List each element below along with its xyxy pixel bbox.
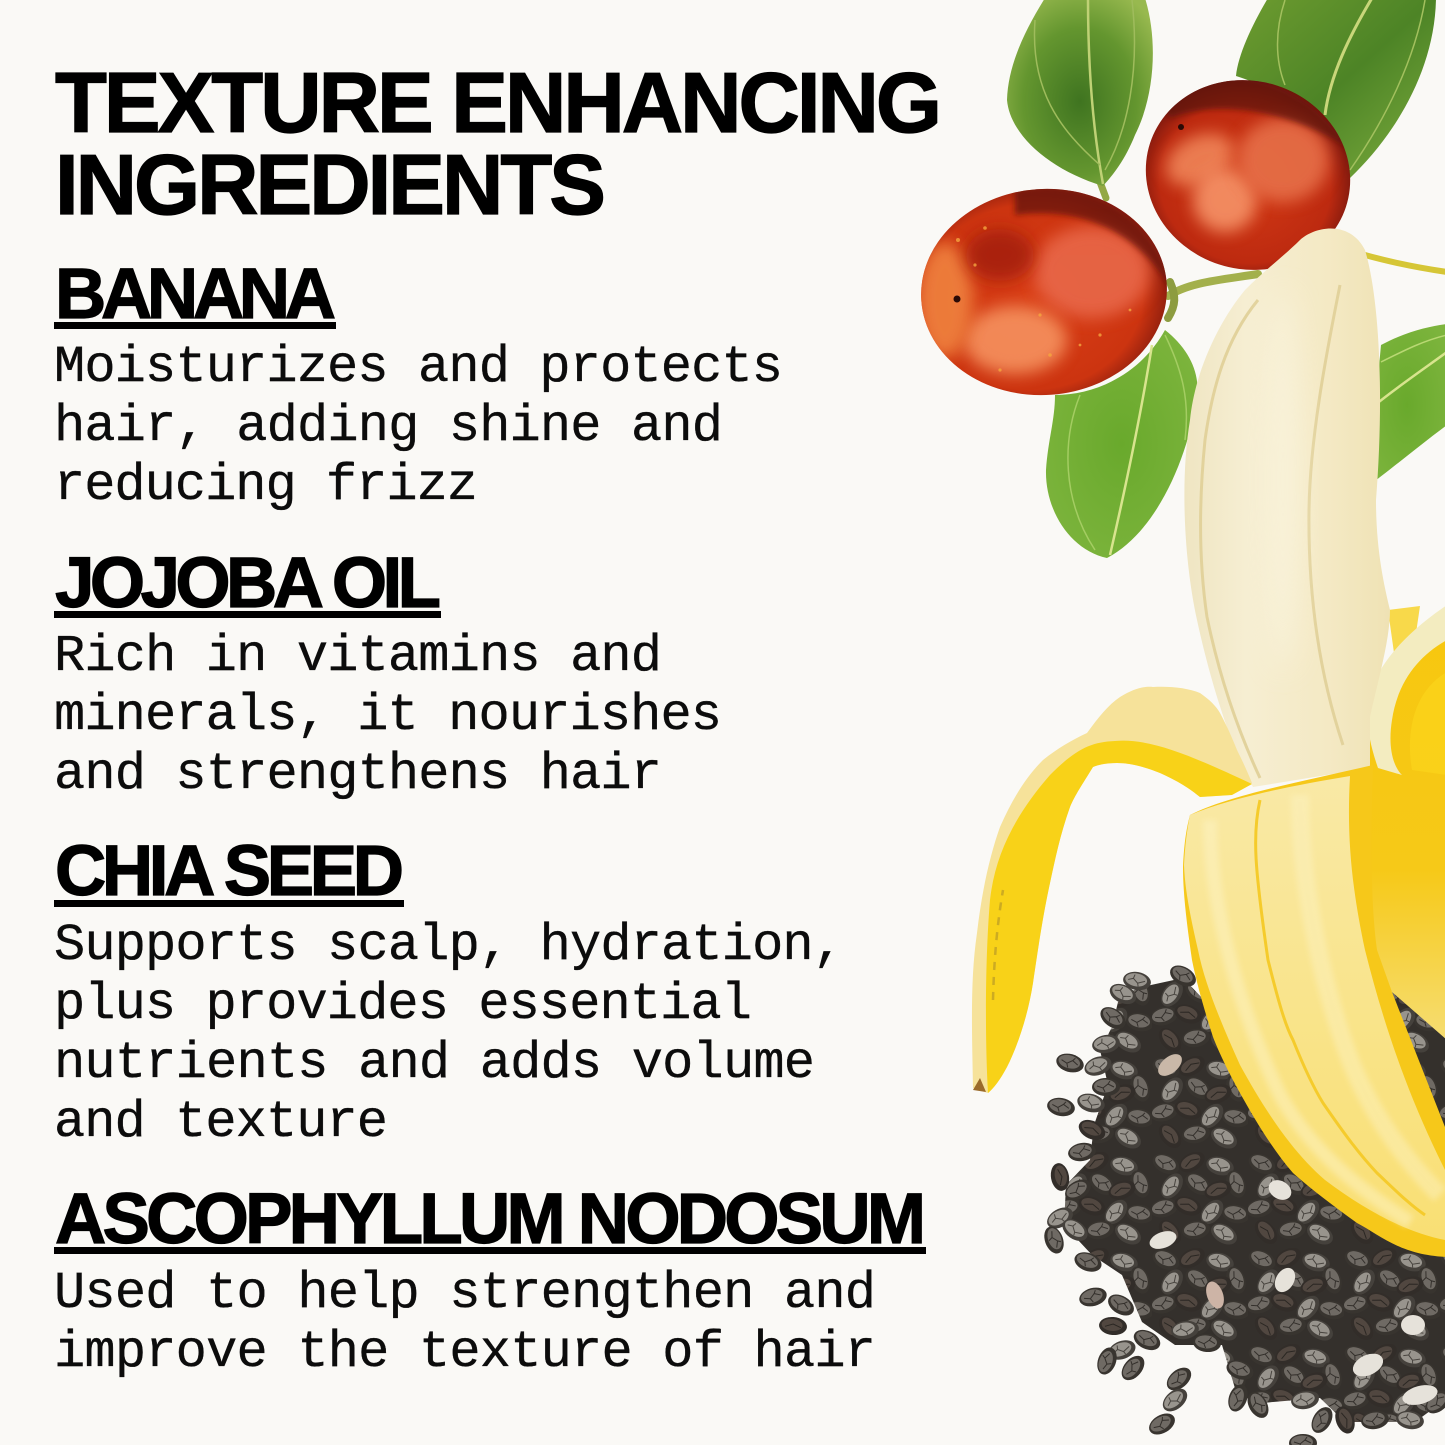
heading: banana: BANANA xyxy=(55,255,336,334)
title: TEXTURE ENHANCING xyxy=(55,56,942,151)
heading: chia seed: CHIA SEED xyxy=(55,832,404,911)
text: ascophyllum description: Used to help strengthen and xyxy=(54,1264,876,1323)
leaf: top left xyxy=(1007,0,1153,186)
fruit: left jujube xyxy=(921,188,1167,396)
text: banana description: hair, adding shine and xyxy=(54,397,723,456)
text: banana description: reducing frizz xyxy=(54,456,478,515)
text: jojoba description: and strengthens hair xyxy=(54,745,662,804)
text: chia description: plus provides essential xyxy=(54,975,752,1034)
icon: banana xyxy=(972,228,1445,1257)
leaf: right xyxy=(1367,324,1445,487)
icon: jujube fruits xyxy=(914,54,1375,403)
text: jojoba description: minerals, it nourishes xyxy=(54,686,722,745)
text: jojoba description: Rich in vitamins and xyxy=(54,627,662,686)
text: jojoba description xyxy=(54,627,722,804)
leaf: lower xyxy=(1046,330,1197,558)
text: chia description: Supports scalp, hydration, xyxy=(54,916,844,975)
panel: chia seed xyxy=(54,832,844,1152)
panel: banana xyxy=(54,255,783,515)
text: banana description xyxy=(54,338,783,515)
text: ascophyllum description: improve the texture of hair xyxy=(54,1323,876,1382)
text: chia description: nutrients and adds volume xyxy=(54,1034,815,1093)
left peel xyxy=(972,687,1252,1093)
title: INGREDIENTS xyxy=(55,138,606,233)
banana flesh xyxy=(1184,228,1390,787)
text: banana description: Moisturizes and protects xyxy=(54,338,783,397)
white chia seeds xyxy=(1147,1050,1440,1408)
text: ascophyllum description xyxy=(54,1264,876,1382)
center peel xyxy=(1183,765,1445,1257)
title xyxy=(55,56,942,233)
fruit: right jujube xyxy=(1146,80,1350,270)
panel: jojoba oil xyxy=(54,544,722,804)
text: chia description: and texture xyxy=(54,1093,388,1152)
icon: jujube stems xyxy=(1100,182,1445,318)
text: chia description xyxy=(54,916,844,1152)
leaf: top right xyxy=(1236,0,1436,178)
heading: jojoba oil: JOJOBA OIL xyxy=(55,544,441,623)
heading: ascophyllum nodosum: ASCOPHYLLUM NODOSUM xyxy=(55,1180,926,1259)
right peel and inner xyxy=(1365,605,1445,1040)
icon: chia seed pile xyxy=(1041,961,1445,1445)
icon: leaves xyxy=(1007,0,1445,558)
panel: ascophyllum nodosum xyxy=(54,1180,926,1382)
